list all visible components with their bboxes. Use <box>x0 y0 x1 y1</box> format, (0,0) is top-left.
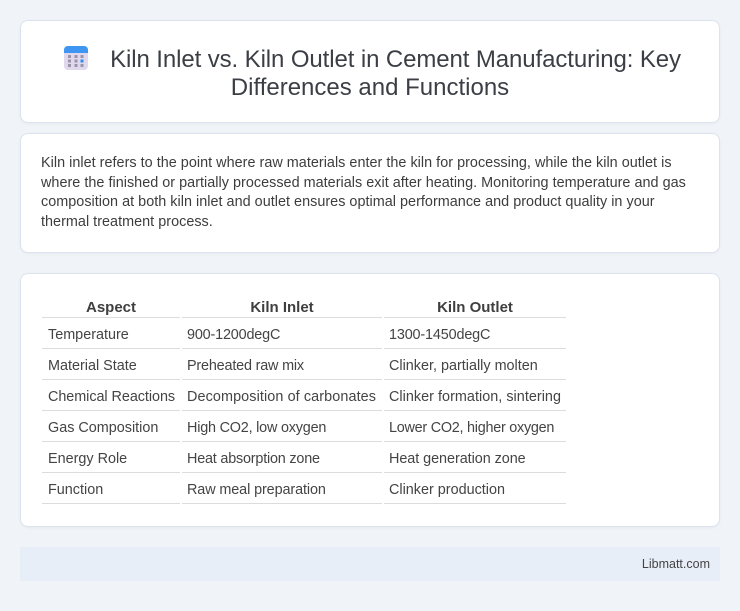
row: Gas Composition <box>48 420 554 436</box>
row: Energy Role: Heat generation zone <box>389 451 526 467</box>
column heading: Kiln Outlet: Kiln Outlet <box>437 299 513 316</box>
panel: comparison table card <box>20 273 720 527</box>
row: Energy Role <box>48 451 526 467</box>
title <box>110 46 681 101</box>
text block: intro paragraph: Kiln inlet refers to the point where raw materials enter the kiln for processing, while the kiln outlet is <box>41 155 672 171</box>
title: Differences and Functions <box>231 74 509 101</box>
column heading: Kiln Inlet: Kiln Inlet <box>250 299 314 316</box>
row: Temperature: 1300-1450degC <box>389 327 490 343</box>
text block: intro paragraph: where the finished or partially processed materials exit after heating. Monitoring temperature and gas <box>41 175 686 191</box>
row: Material State: Clinker, partially molten <box>389 358 538 374</box>
column heading: Aspect: Aspect <box>86 299 136 316</box>
title: Kiln Inlet vs. Kiln Outlet in Cement Manufacturing: Key <box>110 46 681 73</box>
row: Temperature: Temperature <box>48 327 129 343</box>
panel: intro card <box>20 133 720 253</box>
text block: intro paragraph <box>41 155 686 230</box>
row: Chemical Reactions: Clinker formation, sintering <box>389 389 561 405</box>
row: Chemical Reactions <box>48 389 561 405</box>
row: Energy Role: Heat absorption zone <box>187 451 320 467</box>
comparison table <box>42 299 566 504</box>
row: Material State: Preheated raw mix <box>187 358 304 374</box>
footer bar <box>20 547 720 581</box>
row: Chemical Reactions: Decomposition of carbonates <box>187 389 376 405</box>
row: Energy Role: Energy Role <box>48 451 127 467</box>
text block: intro paragraph: thermal treatment process. <box>41 214 213 230</box>
text block: intro paragraph: composition at both kiln inlet and outlet ensures optimal performance and product quality in your <box>41 194 655 210</box>
row: Temperature: 900-1200degC <box>187 327 280 343</box>
row: Function <box>48 482 505 498</box>
row: Function: Raw meal preparation <box>187 482 326 498</box>
icon: calendar <box>64 46 88 70</box>
row: Function: Function <box>48 482 103 498</box>
row: Function: Clinker production <box>389 482 505 498</box>
footer credit: Libmatt.com <box>642 557 710 571</box>
row: Material State: Material State <box>48 358 137 374</box>
row: Gas Composition: High CO2, low oxygen <box>187 420 326 436</box>
row: Gas Composition: Gas Composition <box>48 420 158 436</box>
row: Gas Composition: Lower CO2, higher oxygen <box>389 420 554 436</box>
row: Temperature <box>48 327 490 343</box>
row: Chemical Reactions: Chemical Reactions <box>48 389 175 405</box>
row: Material State <box>48 358 538 374</box>
panel: header card <box>20 20 720 123</box>
